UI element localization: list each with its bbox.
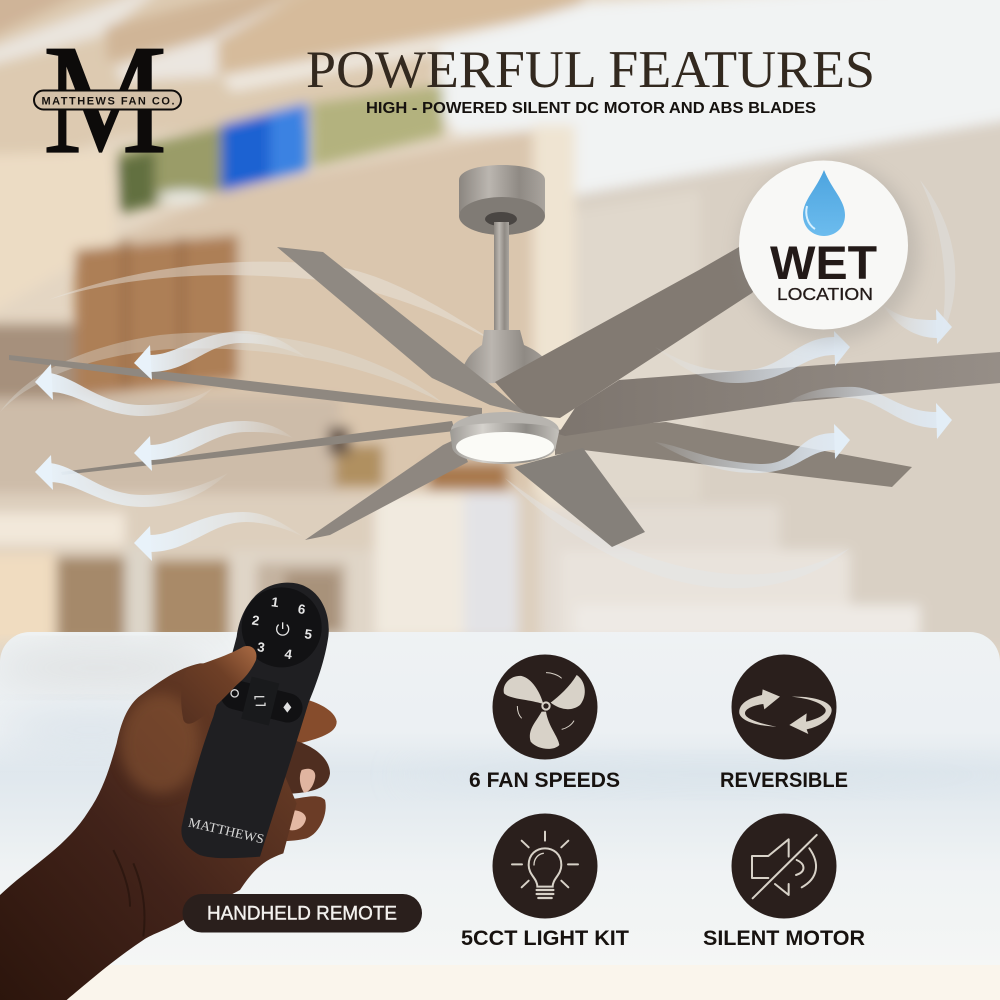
badge: WET: WET (770, 236, 877, 289)
air flow swoosh behind fan (0, 180, 955, 588)
remote (181, 583, 329, 858)
arrow 1 (134, 331, 307, 380)
icon: water drop (803, 170, 845, 236)
cupboard (75, 235, 238, 397)
label: reversible: REVERSIBLE (720, 768, 848, 792)
right wall (575, 118, 1000, 650)
things on counter (335, 445, 383, 487)
icon: light bulb (492, 814, 598, 918)
remote: power symbol (277, 622, 289, 635)
arrow 8 (786, 387, 952, 439)
feature: 5cct light kit (461, 814, 629, 950)
fan: upper left blade (277, 247, 527, 414)
icon: reverse arrows (732, 654, 836, 760)
label pill: handheld remote (182, 894, 422, 932)
badge: LOCATION: LOCATION (777, 284, 873, 304)
label: 5cct light kit: 5CCT LIGHT KIT (461, 926, 629, 950)
remote: button row (218, 677, 306, 726)
lower floor (0, 960, 1000, 1000)
hand: fingers (263, 698, 337, 841)
icon: muted speaker (732, 814, 836, 918)
fan: bottom blade (514, 448, 645, 547)
arrow 4 (35, 455, 228, 507)
feature: 6 fan speeds (469, 654, 620, 792)
hand: back highlight (113, 693, 200, 937)
air flow arrows right (655, 305, 952, 473)
fan: bottom-left blade (305, 438, 468, 540)
fan: left thin blade (9, 355, 482, 418)
fan: lower-left thin blade (61, 421, 455, 475)
remote: speed numbers: 4 (284, 646, 294, 662)
arrow 3 (134, 421, 293, 471)
remote: dial (242, 587, 322, 667)
greenery (312, 85, 443, 167)
fan: canopy (459, 165, 545, 235)
arrow 2 (35, 364, 214, 416)
arrow 9 (655, 424, 850, 473)
logo: monogram M: M (43, 12, 167, 186)
logo: name pill: MATTHEWS FAN CO. (42, 96, 174, 108)
hand holding remote (0, 583, 337, 1000)
feature: reversible (720, 654, 848, 792)
remote: speed numbers: 2 (251, 613, 260, 628)
title: POWERFUL FEATURES (306, 41, 875, 99)
blue curtain (221, 103, 308, 192)
remote: speed numbers: 6 (297, 601, 306, 617)
arrow 5 (134, 512, 304, 561)
logo: name pill (34, 90, 181, 110)
fan: lower right blade (555, 422, 912, 487)
centre wall (115, 130, 533, 495)
air flow arrows left (35, 331, 307, 561)
fan: upper right blade (495, 247, 790, 418)
arrow 7 (655, 331, 850, 383)
badge: wet location (739, 160, 919, 342)
remote: speed numbers: 1 (270, 594, 280, 610)
label: silent motor: SILENT MOTOR (703, 926, 865, 950)
ceiling fan (9, 165, 1000, 547)
arrow 6 (883, 305, 952, 344)
icon: fan (492, 654, 598, 760)
hand: palm and arm (0, 663, 297, 1000)
subtitle: HIGH - POWERED SILENT DC MOTOR AND ABS BLADES (366, 100, 816, 117)
ceiling and beams (0, 0, 620, 180)
feature: silent motor (703, 814, 865, 950)
logo (34, 12, 181, 186)
fan: right blade (558, 352, 1000, 436)
fan: light ring (450, 412, 559, 464)
label pill: handheld remote: HANDHELD REMOTE (207, 902, 397, 924)
panel: features background (0, 632, 1000, 965)
remote: speed numbers (251, 594, 314, 662)
fan: downrod (494, 222, 509, 332)
label: 6 fan speeds: 6 FAN SPEEDS (469, 768, 620, 792)
remote: brand: MATTHEWS (187, 815, 266, 847)
fan: motor housing (459, 330, 552, 385)
hand: thumb (181, 646, 256, 724)
remote: speed numbers: 3 (256, 639, 266, 655)
lower counter (0, 493, 540, 643)
column (533, 125, 575, 605)
sky (435, 0, 1000, 195)
stairs (540, 505, 780, 640)
left wall (0, 320, 115, 400)
cream left wall (0, 150, 115, 320)
remote: speed numbers: 5 (304, 626, 314, 642)
